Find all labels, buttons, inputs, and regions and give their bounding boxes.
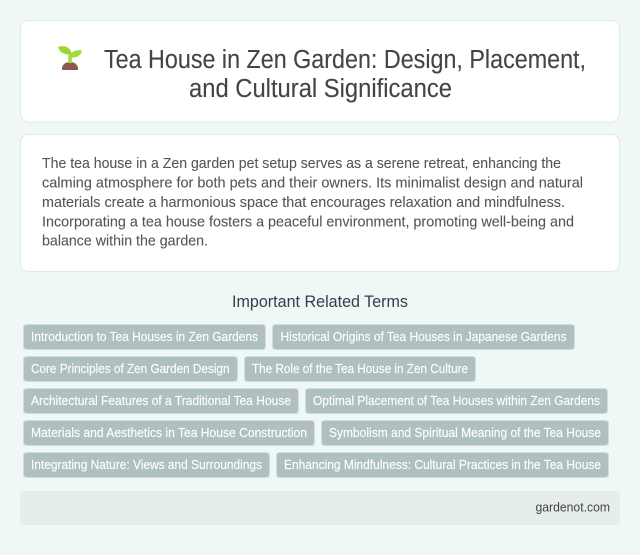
title: Tea House in Zen Garden: Design, Placement,	[104, 46, 586, 74]
description text: calming atmosphere for both pets and their owners. Its minimalist design and natural	[42, 176, 583, 192]
panel: description card	[20, 134, 620, 272]
description text: materials create a harmonious space that encourages relaxation and mindfulness.	[42, 195, 565, 211]
description text: The tea house in a Zen garden pet setup serves as a serene retreat, enhancing the	[42, 156, 561, 172]
tag: enhancing mindfulness: Enhancing Mindfulness: Cultural Practices in the Tea House	[284, 458, 601, 472]
tag: symbolism	[322, 420, 608, 446]
heading: important related terms: Important Related Terms	[232, 293, 408, 311]
tag: core principles: Core Principles of Zen Garden Design	[31, 362, 230, 376]
tag: integrating nature	[24, 452, 270, 478]
footer: gardenot.com	[536, 500, 610, 514]
tag: role of the tea house: The Role of the Tea House in Zen Culture	[252, 362, 468, 376]
footer	[20, 491, 620, 525]
tag: historical origins: Historical Origins of Tea Houses in Japanese Gardens	[280, 330, 566, 344]
tag: materials and aesthetics: Materials and Aesthetics in Tea House Construction	[31, 426, 307, 440]
tag: role of the tea house	[244, 356, 476, 382]
tag list	[24, 324, 608, 478]
tag: introduction	[24, 324, 266, 350]
tag: introduction: Introduction to Tea Houses in Zen Gardens	[31, 330, 258, 344]
title	[104, 46, 586, 103]
tag: historical origins	[272, 324, 574, 350]
tag: optimal placement	[306, 388, 608, 414]
tag: optimal placement: Optimal Placement of Tea Houses within Zen Gardens	[313, 394, 600, 408]
tag: architectural features: Architectural Features of a Traditional Tea House	[31, 394, 291, 408]
description text: balance within the garden.	[42, 234, 208, 250]
description text: Incorporating a tea house fosters a peaceful environment, promoting well-being and	[42, 214, 574, 230]
tag: architectural features	[24, 388, 298, 414]
tag: core principles	[24, 356, 238, 382]
tag: integrating nature: Integrating Nature: Views and Surroundings	[31, 458, 262, 472]
icon: seedling	[58, 46, 82, 70]
tag: materials and aesthetics	[24, 420, 314, 446]
description text	[42, 156, 583, 250]
title: and Cultural Significance	[189, 75, 452, 103]
panel: title card	[20, 20, 620, 122]
tag: enhancing mindfulness	[276, 452, 608, 478]
tag: symbolism: Symbolism and Spiritual Meaning of the Tea House	[329, 426, 601, 440]
